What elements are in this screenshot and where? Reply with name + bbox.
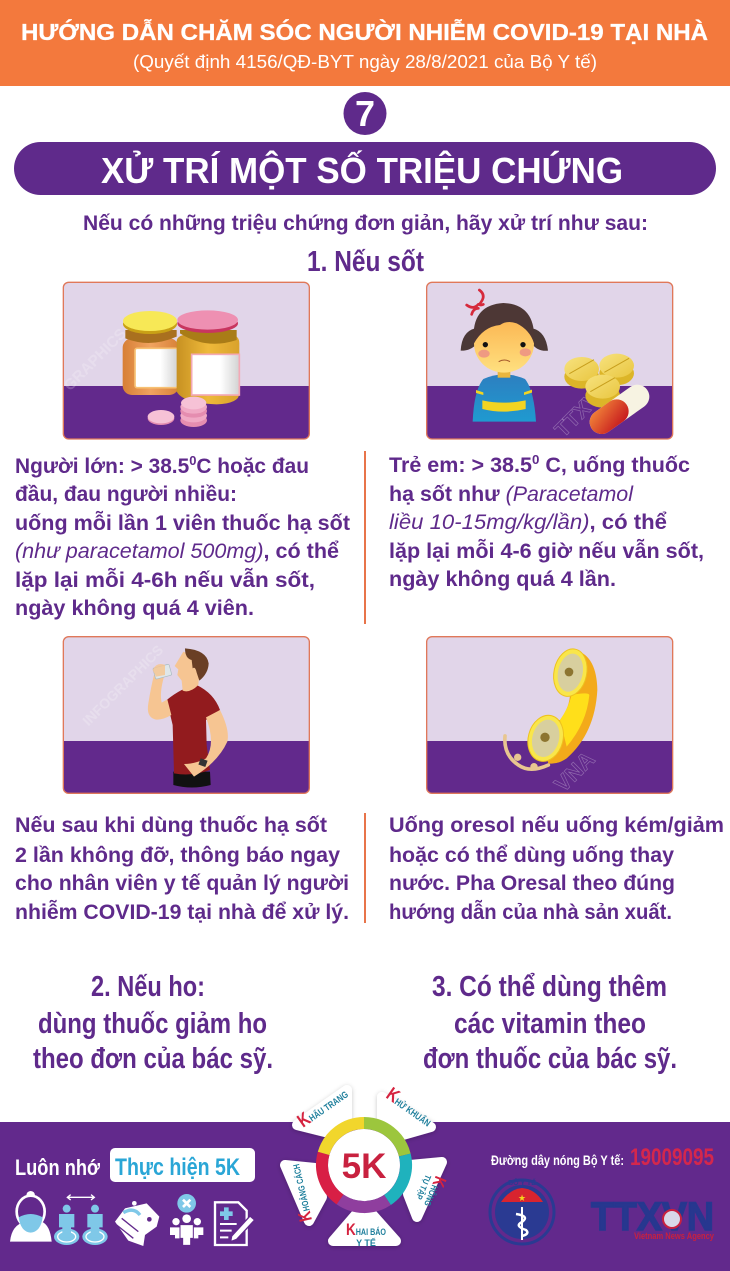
text: when to notify health staff: cho nhân viên y tế quản lý người: [15, 872, 349, 895]
logo: ministry of health: ★: [518, 1193, 526, 1203]
petal label: no gathering line two: TỤ TẬP: [414, 1173, 434, 1202]
man: [148, 648, 228, 787]
petal label: declare: KHAI BÁO: [346, 1220, 386, 1239]
child: [461, 290, 548, 422]
footer band: [0, 1122, 730, 1271]
panel: feverish child and pills: [427, 282, 673, 442]
hotline: [491, 1144, 714, 1171]
text: adult fever advice: ngày không quá 4 viên.: [15, 597, 254, 620]
text: adult fever advice: Người lớn: > 38.5: [15, 455, 190, 478]
heading: 3. vitamins: các vitamin theo: [454, 1008, 646, 1040]
title: HƯỚNG DẪN CHĂM SÓC NGƯỜI NHIỄM COVID-19 TẠI NHÀ: [21, 17, 708, 45]
panel: man drinking water: INFOGRAPHICS: [79, 642, 166, 729]
panel: telephone handset: [427, 637, 673, 797]
intro sentence: Nếu có những triệu chứng đơn giản, hãy xử trí như sau:: [83, 212, 648, 235]
text: child fever advice: [389, 452, 704, 591]
subtitle: (Quyết định 4156/QĐ-BYT ngày 28/8/2021 của Bộ Y tế): [133, 52, 597, 72]
petal label: distance: KHOẢNG CÁCH: [283, 1163, 316, 1224]
logo: ministry of health: BỘ Y TẾ: [508, 1177, 536, 1187]
heading: 3. vitamins: [423, 971, 677, 1075]
heading: 3. vitamins: đơn thuốc của bác sỹ.: [423, 1043, 677, 1075]
number badge 7: 7: [355, 93, 375, 134]
text: adult fever advice: đầu, đau người nhiều:: [15, 483, 237, 506]
text: child fever advice: Trẻ em: > 38.5: [389, 454, 529, 477]
text: when to notify health staff: nhiễm COVID-19 tại nhà để xử lý.: [15, 900, 349, 924]
petal label: disinfect: KHỬ KHUẨN: [382, 1084, 437, 1131]
text: when to notify health staff: 2 lần không đỡ, thông báo ngay: [15, 844, 340, 867]
badge: perform 5K: Thực hiện 5K: [115, 1154, 241, 1181]
icon: health declaration: [215, 1202, 255, 1245]
text: adult fever advice: 0: [189, 453, 196, 468]
icon: no gathering: [170, 1194, 203, 1245]
label: always remember: Luôn nhớ: [15, 1155, 100, 1180]
heading: 2. cough: theo đơn của bác sỹ.: [33, 1043, 273, 1075]
divider: [364, 813, 366, 923]
text: oresol advice: hoặc có thể dùng uống thay: [389, 844, 674, 867]
color ring: [322, 1123, 406, 1207]
5K label: 5K: [342, 1147, 386, 1186]
text: child fever advice: lặp lại mỗi 4-6 giờ nếu vẫn sốt,: [389, 539, 704, 563]
logo: TTXVN: Vietnam News Agency: [634, 1231, 714, 1241]
text: adult fever advice: [15, 453, 350, 620]
text: adult fever advice: lặp lại mỗi 4-6h nếu vẫn sốt,: [15, 568, 315, 592]
logo: ministry of health: [490, 1177, 554, 1244]
icon: keep distance: [54, 1195, 108, 1245]
heading: 2. cough: dùng thuốc giảm ho: [38, 1008, 267, 1040]
header banner: [0, 0, 730, 86]
hotline: Đường dây nóng Bộ Y tế:: [491, 1152, 624, 1168]
heading: 2. cough: [33, 971, 273, 1075]
logo: TTXVN: TTXVN: [591, 1195, 714, 1239]
text: oresol advice: [389, 814, 724, 924]
petal label: declare line two: Y TẾ: [356, 1238, 376, 1248]
text: adult fever advice: uống mỗi lần 1 viên thuốc hạ sốt: [15, 511, 350, 535]
petals: [285, 1090, 442, 1241]
number badge 7: [344, 92, 386, 135]
text: adult fever advice: C hoặc đau: [196, 455, 309, 478]
text: child fever advice: hạ sốt như (Paracetamol: [389, 483, 634, 506]
text: child fever advice: C, uống thuốc: [539, 454, 690, 477]
capsule: [602, 397, 637, 422]
panel: medicine jars: [61, 282, 309, 439]
icon row: 5K actions: [10, 1191, 255, 1246]
panel: telephone handset: VNA: [549, 746, 600, 797]
section heading pill: XỬ TRÍ MỘT SỐ TRIỆU CHỨNG: [101, 149, 623, 191]
text: oresol advice: nước. Pha Oresal theo đúng: [389, 872, 675, 895]
gold jar: [177, 310, 239, 404]
petal label: mask: KHẨU TRANG: [294, 1083, 352, 1132]
text: when to notify health staff: [15, 814, 349, 924]
panel: feverish child and pills: TTXVN: [550, 375, 616, 442]
heading: 1. fever: 1. Nếu sốt: [307, 246, 424, 278]
divider: [364, 451, 366, 624]
handset: [505, 646, 597, 770]
text: adult fever advice: (như paracetamol 500mg) , có thể: [15, 540, 339, 563]
text: child fever advice: liều 10-15mg/kg/lần) , có thể: [389, 511, 667, 534]
section heading pill: [14, 142, 716, 195]
panel: medicine jars: GRAPHICS: [61, 325, 130, 394]
pink tablets: [148, 397, 207, 427]
orange jar: [123, 311, 179, 395]
icon: washing hands: [115, 1201, 159, 1246]
heading: 3. vitamins: 3. Có thể dùng thêm: [432, 971, 667, 1003]
text: when to notify health staff: Nếu sau khi dùng thuốc hạ sốt: [15, 814, 327, 837]
text: oresol advice: Uống oresol nếu uống kém/giảm: [389, 814, 724, 837]
text: oresol advice: hướng dẫn của nhà sản xuất.: [389, 900, 672, 924]
yellow tablets: [564, 354, 634, 408]
heading: 2. cough: 2. Nếu ho:: [91, 971, 205, 1003]
5K wheel: [283, 1083, 450, 1248]
petal label: no gathering: KHÔNG: [420, 1174, 450, 1210]
icon: person wearing mask: [10, 1191, 52, 1242]
text: child fever advice: ngày không quá 4 lần.: [389, 568, 616, 591]
text: child fever advice: 0: [532, 452, 539, 467]
panel: man drinking water: [63, 637, 309, 793]
